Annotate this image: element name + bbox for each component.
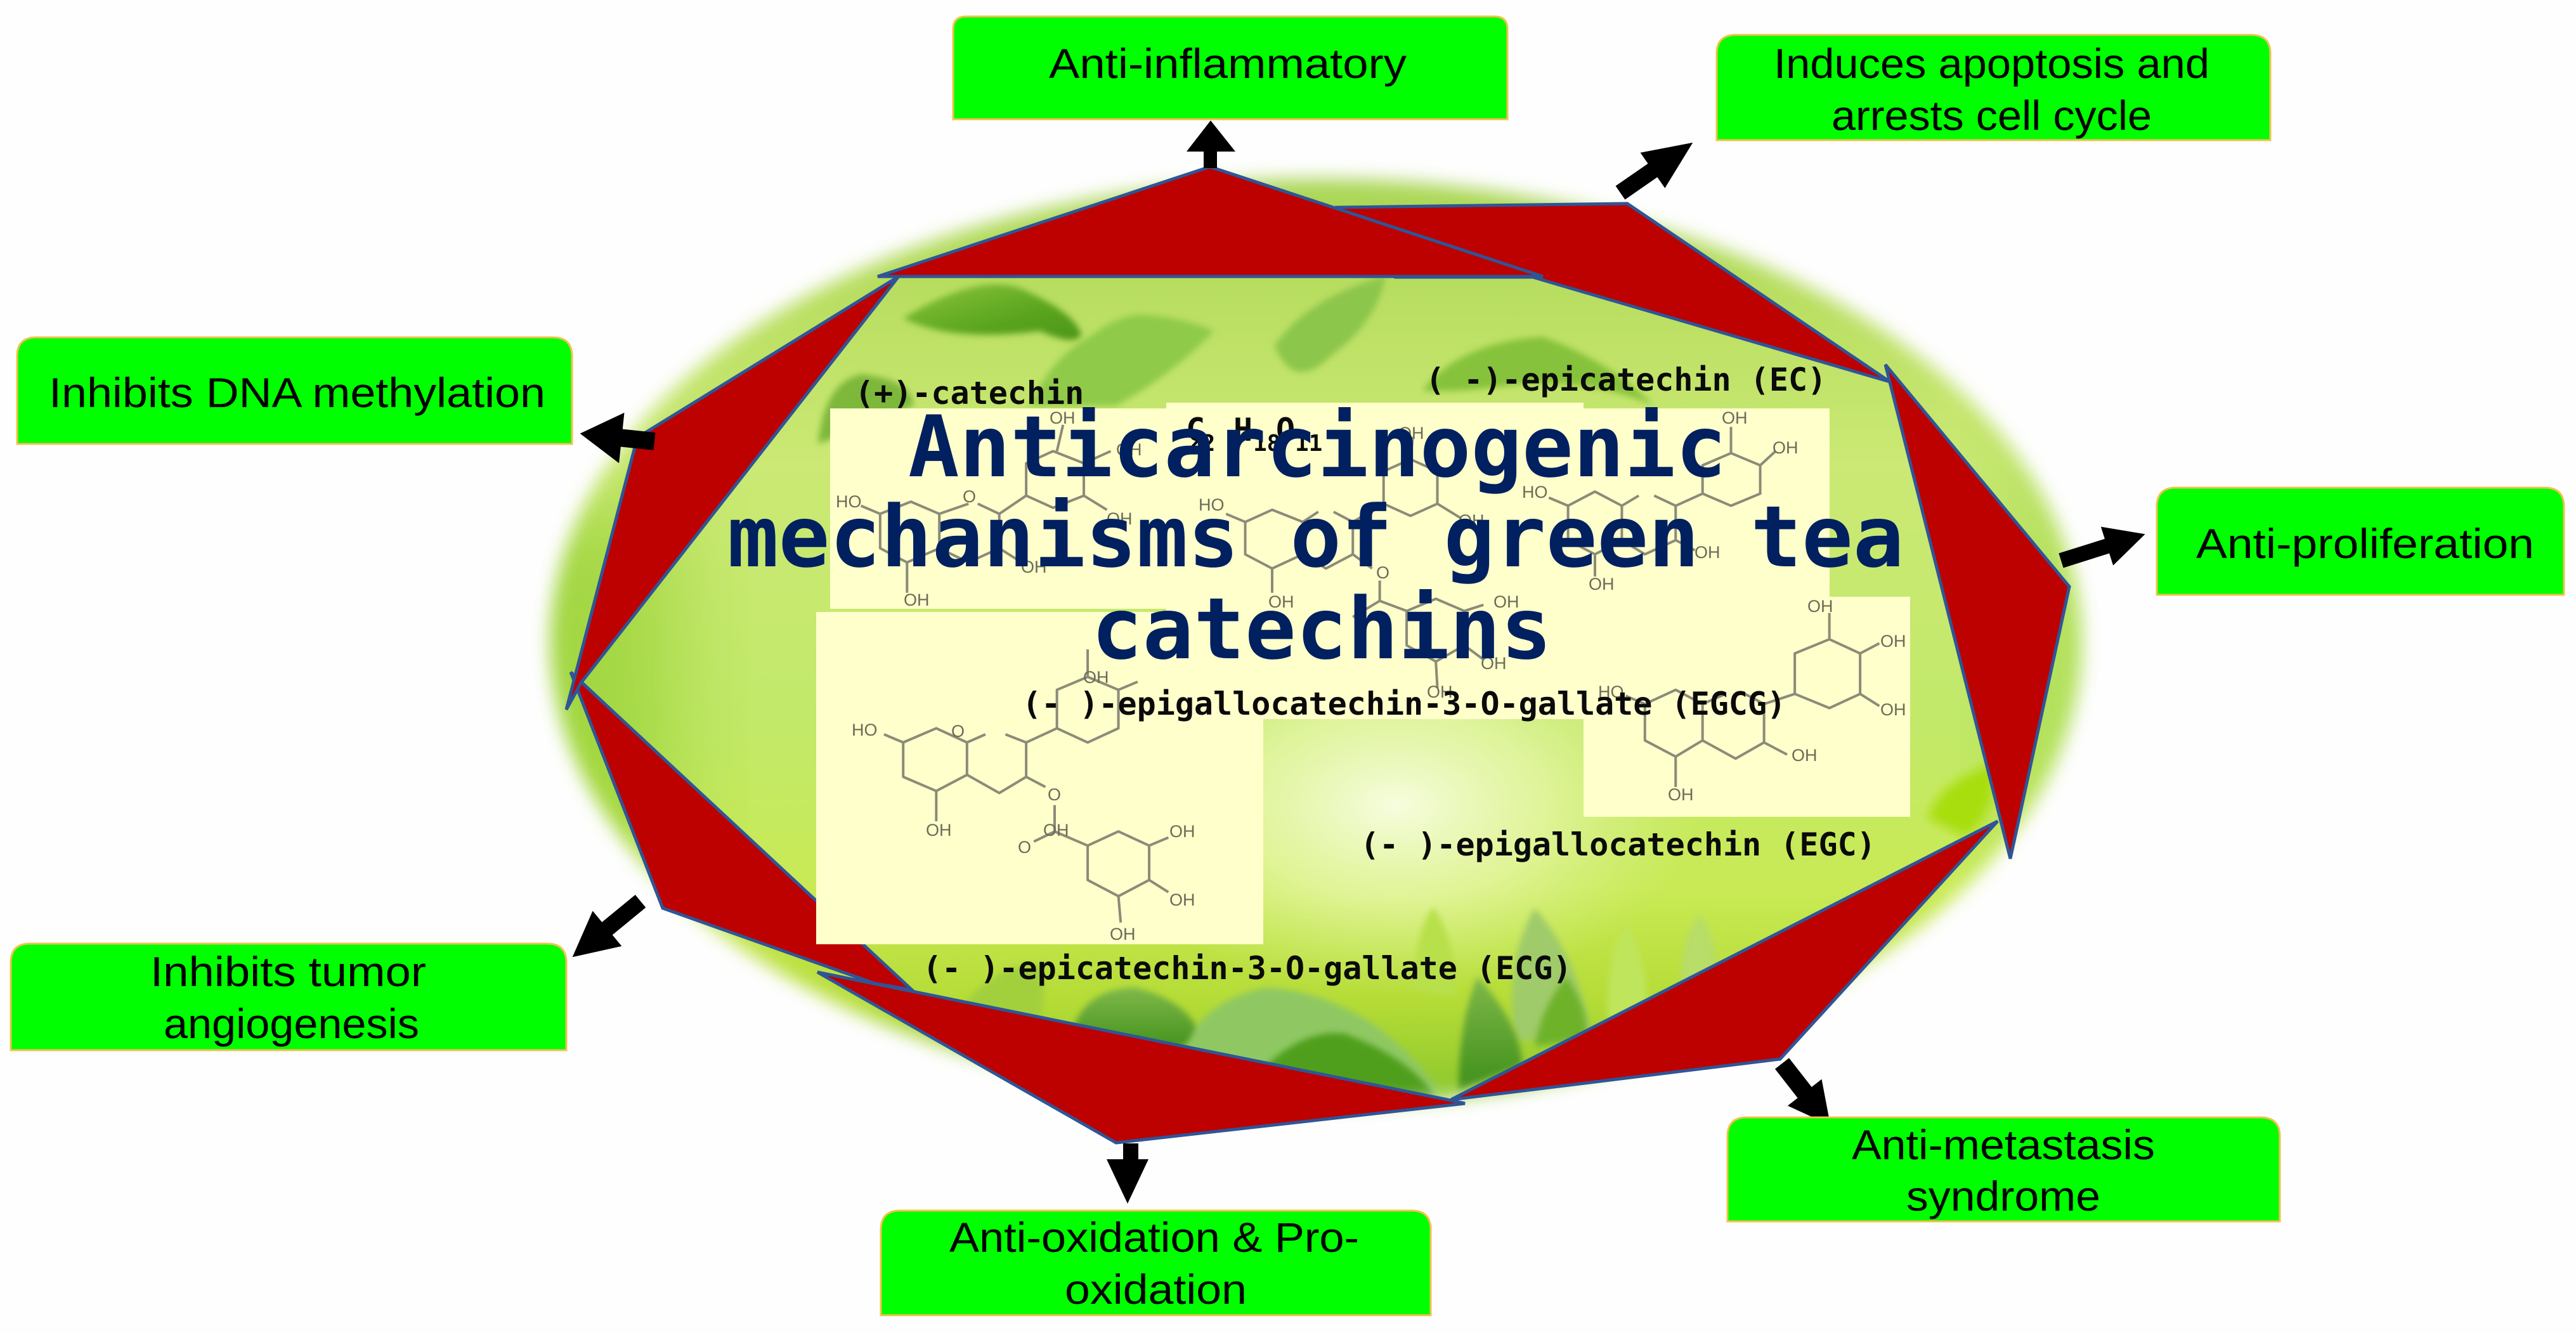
- box: anti-metastasis syndrome: syndrome: [1906, 1173, 2100, 1219]
- chemical structure: ECG: [852, 649, 1195, 944]
- chemical structure: epicatechin: OH: [1589, 575, 1615, 594]
- chemical structure: epicatechin: OH: [1722, 408, 1748, 427]
- box: induces apoptosis: [1717, 35, 2270, 140]
- label: molecular formula: 22: [1188, 431, 1215, 457]
- red segment: lower left: [571, 672, 912, 990]
- label: catechin: (+)-catechin: [855, 375, 1084, 412]
- box: inhibits tumor angiogenesis: angiogenesis: [164, 1000, 419, 1047]
- label: molecular formula: [1186, 412, 1322, 457]
- box: induces apoptosis: Induces apoptosis and: [1774, 40, 2209, 87]
- chemical structure: EGCG: OH: [1398, 424, 1424, 443]
- title: Anticarcinogenic: [908, 398, 1727, 497]
- box: inhibits tumor angiogenesis: Inhibits tumor: [150, 948, 426, 995]
- arrow: to anti-oxidation: [1107, 1143, 1148, 1204]
- chemical structure: EGC: [1598, 597, 1906, 804]
- chemical structure: catechin: OH: [1116, 440, 1142, 459]
- label: EGCG: (- )-epigallocatechin-3-O-gallate (EGCG): [1022, 686, 1786, 722]
- central green tea background oval: [535, 165, 2095, 1119]
- box: anti-inflammatory: [953, 16, 1507, 119]
- chemical structure: EGCG: OH: [1268, 592, 1294, 611]
- label: EGC: (- )-epigallocatechin (EGC): [1360, 826, 1876, 863]
- chemical structure: EGCG: [1199, 424, 1519, 701]
- chemical structure: ECG: O: [951, 722, 965, 741]
- arrow: to anti-metastasis: [1765, 1050, 1847, 1139]
- label: molecular formula: C: [1186, 412, 1205, 448]
- chemical structure: EGC: OH: [1880, 632, 1906, 651]
- title: catechins: [1091, 580, 1552, 679]
- arrow: to DNA methylation: [577, 408, 657, 467]
- label: molecular formula: 18: [1253, 431, 1280, 457]
- red segment: lower right: [1451, 821, 1998, 1100]
- chemical structure: ECG: OH: [926, 821, 951, 840]
- red segment: bottom: [817, 972, 1465, 1143]
- chemical structure: ECG: O: [1018, 838, 1031, 857]
- chemical structure: catechin: HO: [836, 492, 861, 511]
- chemical structure: EGCG: OH: [1493, 592, 1519, 611]
- box: anti-oxidation and pro-oxidation: oxidation: [1065, 1266, 1247, 1313]
- chemical structure: catechin: OH: [1021, 557, 1046, 576]
- chemical structure: ECG: OH: [1169, 890, 1195, 909]
- box: inhibits DNA methylation: Inhibits DNA methylation: [49, 369, 545, 416]
- chemical structure: EGC: OH: [1880, 700, 1906, 719]
- label: molecular formula: O: [1276, 412, 1295, 448]
- arrow: to apoptosis: [1608, 125, 1705, 211]
- yellow structure panels: [816, 403, 1910, 944]
- chemical structure: EGCG: O: [1376, 563, 1389, 582]
- chemical structure: ECG: HO: [852, 720, 878, 739]
- title: mechanisms of green tea: [727, 488, 1904, 587]
- chemical structure: ECG: OH: [1169, 822, 1195, 841]
- red segment: right: [1885, 365, 2069, 859]
- box: anti-oxidation and pro-oxidation: [881, 1211, 1431, 1315]
- chemical structure: ECG: OH: [1110, 925, 1135, 944]
- chemical structure: epicatechin: HO: [1522, 483, 1547, 502]
- red segment: top triangle: [878, 167, 1543, 276]
- chemical structure: catechin: OH: [904, 590, 930, 609]
- box: anti-proliferation: [2157, 488, 2564, 595]
- chemical structure: EGCG: HO: [1199, 495, 1224, 514]
- chemical structure: EGC: OH: [1807, 597, 1833, 616]
- chemical structure: EGC: OH: [1668, 785, 1693, 804]
- label: molecular formula: H: [1233, 412, 1252, 448]
- chemical structure: epicatechin: [1522, 408, 1799, 594]
- box: induces apoptosis: arrests cell cycle: [1831, 92, 2152, 139]
- arrow: to tumor angiogenesis: [558, 883, 655, 975]
- chemical structure: catechin: O: [963, 487, 976, 506]
- chemical structure: EGCG: OH: [1427, 682, 1452, 701]
- chemical structure: EGC: HO: [1598, 682, 1623, 701]
- box: anti-inflammatory: Anti-inflammatory: [1049, 40, 1407, 87]
- title: [727, 398, 1904, 679]
- chemical structure: EGC: OH: [1792, 746, 1818, 765]
- arrow: to anti-proliferation: [2055, 515, 2151, 580]
- chemical structure: catechin: [836, 408, 1142, 609]
- chemical structure: epicatechin: OH: [1695, 543, 1720, 562]
- chemical structure: epicatechin: OH: [1773, 438, 1799, 457]
- box: anti-metastasis syndrome: Anti-metastasis: [1852, 1121, 2155, 1168]
- chemical structure: catechin: OH: [1050, 408, 1076, 427]
- chemical structure: EGCG: OH: [1481, 654, 1507, 673]
- chemical structure: catechin: OH: [1107, 509, 1133, 528]
- label: epicatechin: ( -)-epicatechin (EC): [1426, 361, 1826, 398]
- chemical structure: ECG: OH: [1083, 668, 1109, 687]
- chemical structure: ECG: O: [1048, 785, 1061, 804]
- box: inhibits DNA methylation: [17, 337, 572, 444]
- box: anti-oxidation and pro-oxidation: Anti-oxidation & Pro-: [949, 1214, 1359, 1261]
- label: ECG: (- )-epicatechin-3-O-gallate (ECG): [923, 950, 1571, 987]
- red segment: top right: [1338, 204, 1890, 382]
- chemical structure: ECG: OH: [1043, 821, 1069, 840]
- arrow: to anti-inflammatory: [1187, 120, 1235, 168]
- box: anti-proliferation: Anti-proliferation: [2196, 520, 2534, 567]
- red frame ring: [566, 167, 2069, 1143]
- box: anti-metastasis syndrome: [1727, 1117, 2280, 1221]
- box: inhibits tumor angiogenesis: [11, 944, 566, 1050]
- red segment: left: [566, 276, 899, 710]
- chemical structure: EGCG: OH: [1459, 511, 1484, 530]
- label: molecular formula: 11: [1295, 431, 1322, 457]
